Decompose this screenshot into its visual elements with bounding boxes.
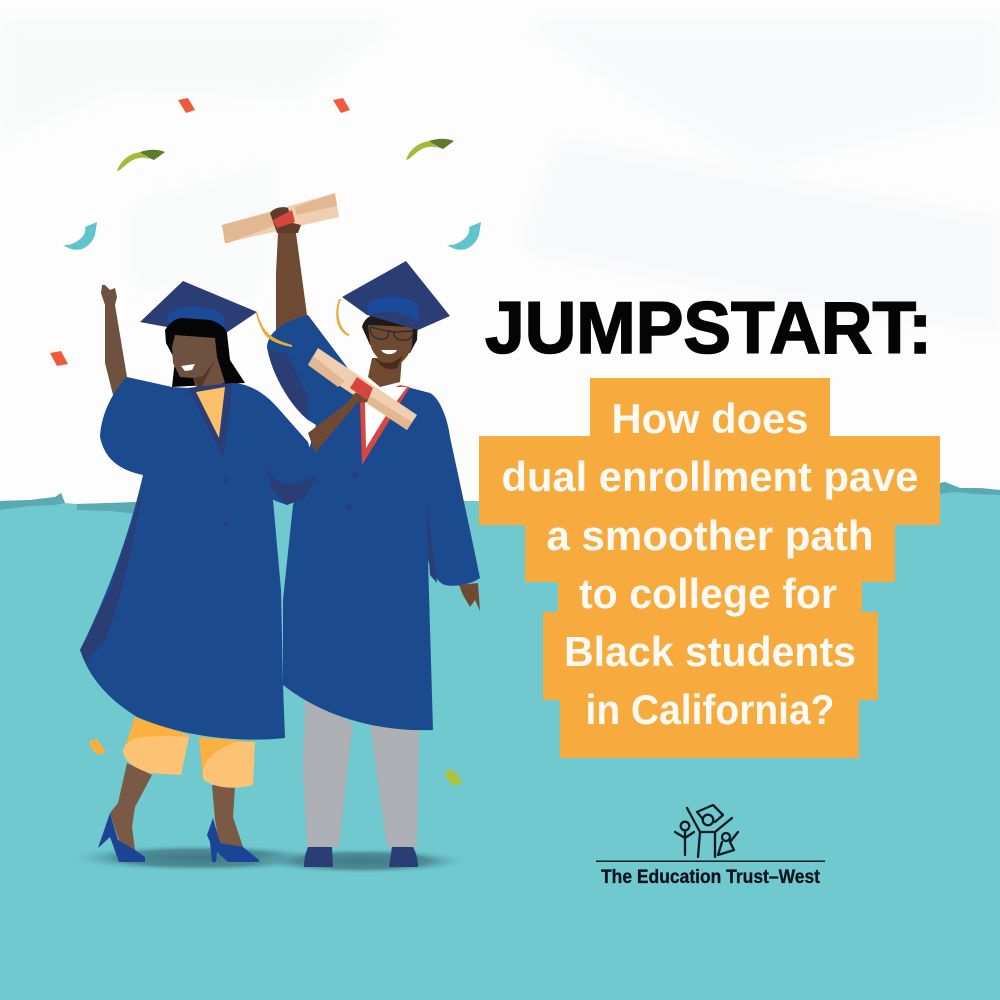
man right hand	[459, 583, 480, 611]
ground shadows	[65, 844, 472, 874]
confetti	[50, 98, 481, 786]
logo icon	[675, 805, 738, 857]
man gown	[267, 315, 480, 730]
question text: Black students	[564, 628, 856, 675]
question text	[502, 395, 918, 733]
man cap	[336, 261, 450, 336]
teal ground with torn edge	[0, 482, 1000, 1000]
man neck and head	[362, 313, 418, 387]
woman cap	[140, 281, 257, 337]
logo: The Education Trust-West	[596, 805, 825, 888]
man lower scroll and hand	[308, 348, 417, 453]
woman gown	[80, 377, 317, 740]
woman hair	[165, 318, 245, 387]
woman legs and heels	[98, 763, 259, 862]
question text: to college for	[579, 570, 837, 617]
logo wordmark: The Education Trust–West	[601, 867, 821, 888]
logo rule	[596, 860, 825, 862]
title: JUMPSTART:	[485, 288, 932, 369]
man raised arm and scroll	[222, 193, 339, 333]
question text: How does	[612, 395, 808, 442]
graduate: woman	[80, 281, 317, 862]
woman shorts	[123, 717, 255, 788]
question text: in California?	[586, 686, 834, 733]
woman raised arm	[101, 285, 130, 395]
man shirt and red collar	[360, 385, 410, 465]
man trousers and shoes	[303, 700, 419, 867]
orange question panel	[479, 378, 940, 758]
question text: dual enrollment pave	[502, 453, 918, 500]
graduate: man	[222, 193, 480, 867]
question text: a smoother path	[546, 512, 874, 559]
woman face and neck	[172, 335, 225, 390]
woman cap tassel	[256, 312, 292, 347]
